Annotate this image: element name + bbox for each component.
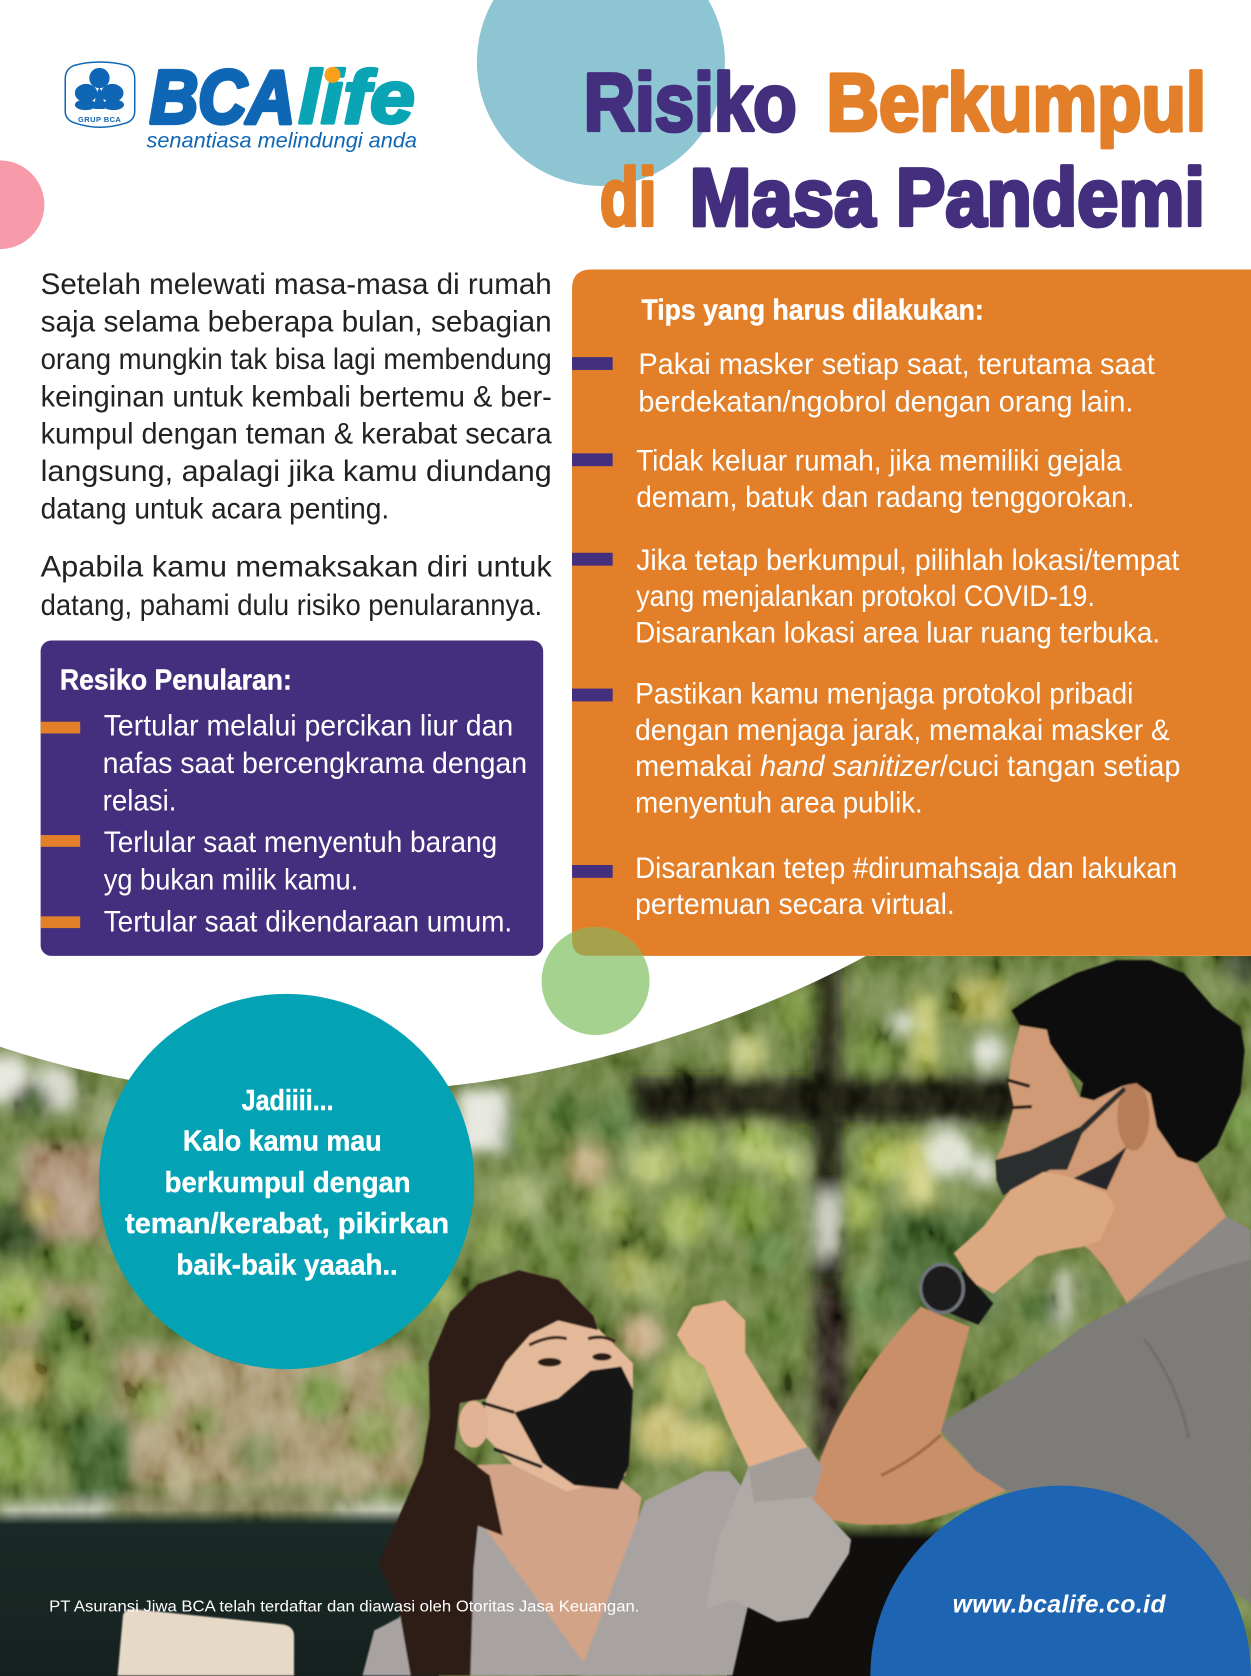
dark beams — [631, 1077, 1026, 1123]
man mask — [995, 1086, 1126, 1195]
risk 1: nafas saat bercengkrama dengan — [103, 747, 527, 780]
panel: transmission risks (purple) — [41, 640, 543, 956]
logo emblem: GRUP BCA — [78, 115, 121, 124]
intro text: langsung, apalagi jika kamu diundang — [41, 455, 552, 488]
risk 1: relasi. — [103, 784, 176, 817]
intro text: orang mungkin tak bisa lagi membendung — [41, 343, 552, 376]
laptop — [118, 1609, 294, 1675]
risk 2: yg bukan milik kamu. — [104, 864, 358, 897]
callout: teal circle: Kalo kamu mau — [183, 1125, 382, 1157]
logo orange dot — [325, 67, 341, 83]
tip 1: Pakai masker setiap saat, terutama saat — [638, 348, 1155, 381]
foliage texture — [0, 941, 1251, 1676]
intro text: datang untuk acara penting. — [41, 493, 389, 526]
risk 2: Terlular saat menyentuh barang — [104, 826, 497, 859]
logo tagline: senantiasa melindungi anda — [146, 129, 417, 153]
tip 1: berdekatan/ngobrol dengan orang lain. — [638, 386, 1133, 419]
footer disclaimer: PT Asuransi Jiwa BCA telah terdaftar dan diawasi oleh Otoritas Jasa Keuangan. — [49, 1598, 639, 1615]
tip 4: Pastikan kamu menjaga protokol pribadi — [635, 678, 1133, 711]
man ear — [1117, 1082, 1149, 1150]
title: Masa Pandemi — [690, 153, 1205, 244]
tips heading: Tips yang harus dilakukan: — [642, 295, 984, 327]
man fist — [954, 1172, 1115, 1294]
logo emblem — [65, 62, 135, 127]
decorative circle: light blue — [477, 0, 725, 186]
risk 3: Tertular saat dikendaraan umum. — [104, 905, 512, 938]
woman neck and chest — [474, 1462, 642, 1668]
risk 2 — [41, 826, 497, 897]
website badge: blue circle — [870, 1486, 1251, 1676]
tip 2: demam, batuk dan radang tenggorokan. — [636, 481, 1134, 514]
title: Risiko — [584, 57, 797, 148]
intro text: saja selama beberapa bulan, sebagian — [41, 305, 552, 338]
tip 5: Disarankan tetep #dirumahsaja dan lakukan — [635, 852, 1177, 885]
woman hand and forearm — [677, 1300, 808, 1467]
tip 3: Jika tetap berkumpul, pilihlah lokasi/tempat — [636, 544, 1179, 577]
tip 4: memakai hand sanitizer/cuci tangan setiap — [635, 750, 1180, 783]
dark lower band right — [727, 1524, 962, 1676]
tip 3: Disarankan lokasi area luar ruang terbuka. — [635, 617, 1160, 650]
woman mask — [514, 1366, 633, 1489]
man upper arm and forearm — [811, 1307, 1008, 1525]
dark lower band — [0, 1510, 438, 1676]
title — [584, 57, 1206, 244]
decorative circle: green — [542, 927, 650, 1035]
woman hair — [379, 1270, 598, 1675]
callout: teal circle: baik-baik yaaah.. — [176, 1250, 398, 1282]
callout: teal circle: berkumpul dengan — [165, 1167, 411, 1199]
man neck and face — [997, 1025, 1226, 1303]
callout: teal circle: teman/kerabat, pikirkan — [125, 1208, 449, 1240]
title: di — [600, 153, 657, 244]
risk 1: Tertular melalui percikan liur dan — [104, 710, 513, 743]
woman sleeve — [740, 1467, 852, 1623]
risk 1 — [41, 710, 527, 817]
tip 5 — [572, 852, 1177, 921]
panel: tips (orange) — [572, 269, 1251, 956]
title: Berkumpul — [827, 57, 1206, 148]
woman face — [481, 1318, 633, 1492]
risks heading: Resiko Penularan: — [60, 665, 292, 697]
photo: two people bumping elbows — [0, 939, 1251, 1676]
woman blouse — [362, 1471, 748, 1675]
tip 3 — [572, 544, 1179, 650]
callout: teal circle: Jadiiii... — [242, 1085, 334, 1117]
intro text — [41, 268, 552, 526]
blurred foliage background — [0, 956, 1251, 1523]
intro text: keinginan untuk kembali bertemu & ber- — [41, 380, 552, 413]
woman eyes — [538, 1358, 561, 1366]
intro text second paragraph — [41, 550, 552, 622]
intro text: Setelah melewati masa-masa di rumah — [41, 268, 552, 301]
watch — [921, 1264, 993, 1325]
callout: teal circle — [99, 994, 474, 1369]
tip 1 — [572, 348, 1155, 419]
tip 5: pertemuan secara virtual. — [635, 888, 955, 921]
tip 4: dengan menjaga jarak, memakai masker & — [635, 714, 1170, 747]
decorative circle: pink — [0, 160, 44, 249]
website badge: blue circle: www.bcalife.co.id — [953, 1591, 1166, 1618]
man hair — [1011, 960, 1245, 1163]
tip 4 — [572, 678, 1180, 820]
woman ear — [459, 1401, 489, 1448]
tip 2: Tidak keluar rumah, jika memiliki gejala — [636, 444, 1122, 477]
man eye and brow — [1007, 1080, 1032, 1108]
photo subjects — [118, 960, 1251, 1675]
tip 3: yang menjalankan protokol COVID-19. — [636, 580, 1095, 613]
logo wordmark: BCA — [150, 55, 295, 139]
intro text second paragraph: Apabila kamu memaksakan diri untuk — [41, 550, 552, 583]
logo: BCA life — [65, 55, 417, 153]
intro text: kumpul dengan teman & kerabat secara — [41, 418, 552, 451]
tip 4: menyentuh area publik. — [635, 787, 923, 820]
man shirt — [940, 1259, 1251, 1604]
tip 2 — [572, 444, 1134, 514]
intro text second paragraph: datang, pahami dulu risiko penularannya. — [41, 589, 542, 622]
logo: BCA life: life — [298, 55, 415, 139]
